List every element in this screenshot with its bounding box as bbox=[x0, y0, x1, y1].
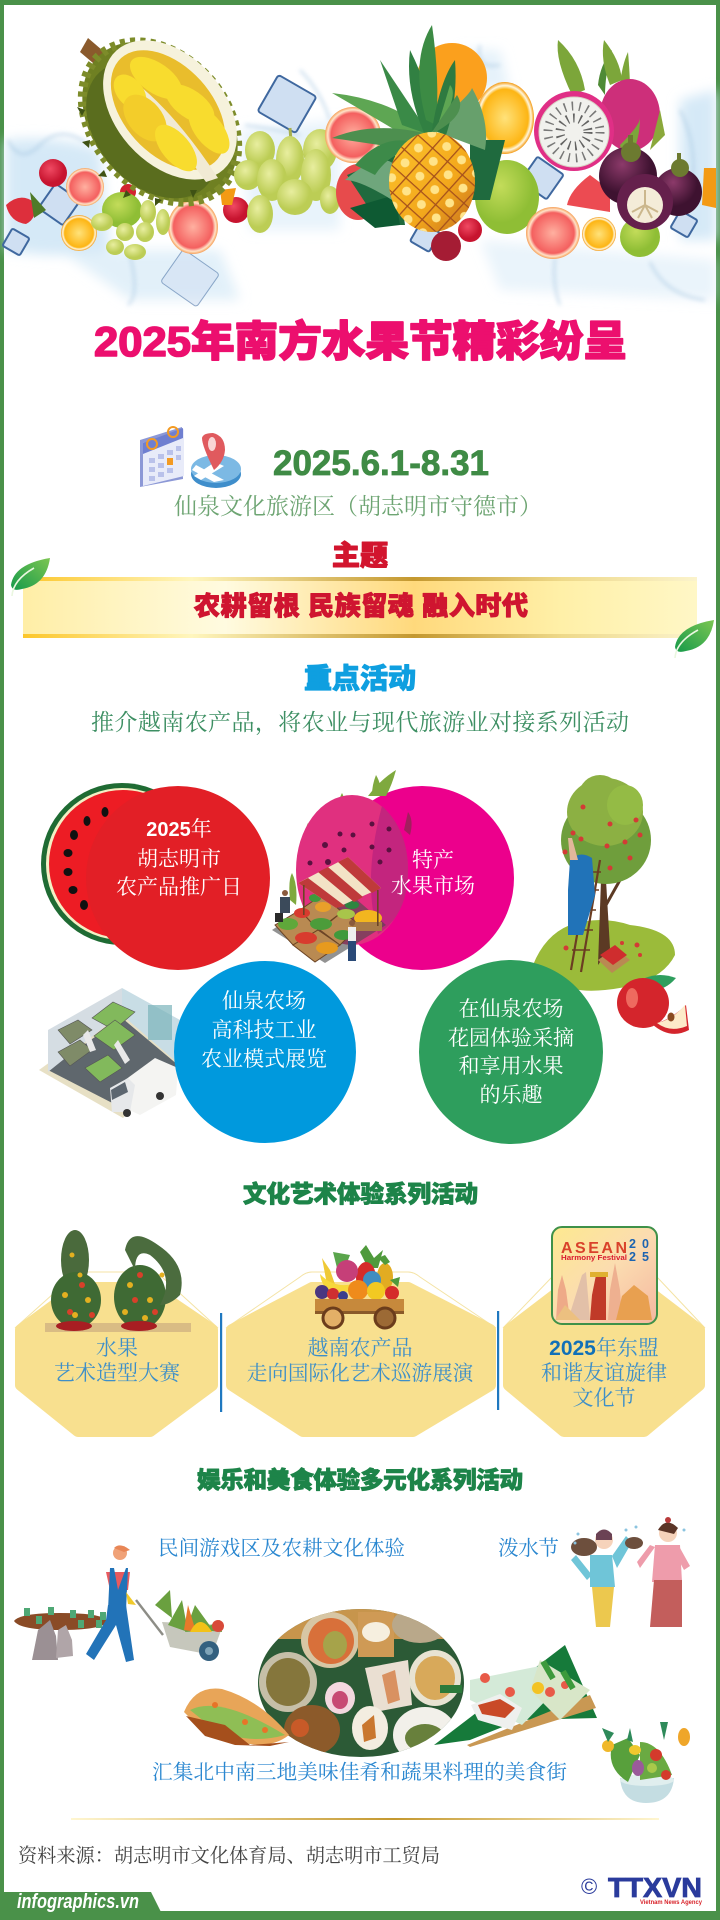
icon: ASEAN festival card: 20 bbox=[629, 1237, 649, 1251]
icon: farmer with wheelbarrow bbox=[14, 1545, 224, 1662]
icon: right leaf bbox=[675, 620, 714, 658]
icon: calendar bbox=[140, 427, 184, 487]
divider bbox=[220, 1313, 222, 1412]
orange bbox=[325, 43, 534, 220]
title: 2025年南方水果节精彩纷呈 bbox=[94, 318, 627, 365]
circle: HCMC agricultural day: 胡志明市 bbox=[137, 847, 221, 871]
water festival label: 泼水节 bbox=[498, 1537, 559, 1560]
panel: ASEAN harmony festival: 和谐友谊旋律 bbox=[541, 1361, 667, 1385]
panel: international art tour: 越南农产品 bbox=[308, 1336, 412, 1360]
dragon fruit bbox=[534, 40, 665, 171]
icon: smart farm bbox=[39, 988, 180, 1118]
water splash bbox=[6, 45, 716, 305]
circle: high-tech farm: 农业模式展览 bbox=[201, 1047, 327, 1071]
icon: ASEAN festival card: 25 bbox=[629, 1250, 649, 1264]
icon: ASEAN festival card bbox=[552, 1227, 657, 1324]
folk games label: 民间游戏区及农耕文化体验 bbox=[158, 1537, 405, 1560]
icon: dragon fruit bbox=[289, 770, 412, 945]
banh mi bbox=[184, 1688, 289, 1746]
circle: HCMC agricultural day: 农产品推广日 bbox=[116, 875, 242, 899]
circle: high-tech farm: 高科技工业 bbox=[212, 1018, 316, 1042]
truck bbox=[110, 1058, 178, 1117]
icon: ASEAN festival card: Harmony Festival bbox=[561, 1253, 627, 1262]
panel: fruit art contest: 水果 bbox=[96, 1336, 138, 1360]
circle: high-tech farm bbox=[174, 961, 356, 1143]
source: 资料来源：胡志明市文化体育局、胡志明市工贸局 bbox=[18, 1845, 440, 1867]
panel: ASEAN harmony festival: 2025年东盟 bbox=[549, 1336, 659, 1360]
circle: high-tech farm: 仙泉农场 bbox=[222, 989, 306, 1013]
icon: left leaf bbox=[11, 558, 50, 596]
theme heading: 主题 bbox=[332, 540, 388, 571]
divider line bbox=[71, 1818, 659, 1820]
circle: specialty fruit market bbox=[289, 770, 514, 970]
circle: fruit picking: 在仙泉农场 bbox=[458, 997, 564, 1021]
theme banner bbox=[23, 577, 697, 638]
panel: international art tour: 走向国际化艺术巡游展演 bbox=[247, 1362, 476, 1385]
panel: fruit art contest: 艺术造型大赛 bbox=[54, 1361, 180, 1385]
key activities subtitle: 推介越南农产品，将农业与现代旅游业对接系列活动 bbox=[91, 710, 629, 736]
food dishes bbox=[184, 1607, 597, 1763]
icon: salad bowl bbox=[602, 1722, 690, 1803]
pineapple bbox=[332, 25, 505, 232]
panel: fruit art contest bbox=[15, 1230, 218, 1431]
TTXVN logo: Vietnam News Agency bbox=[640, 1899, 702, 1906]
circle: fruit picking: 花园体验采摘 bbox=[448, 1026, 574, 1050]
panel: ASEAN harmony festival: 文化节 bbox=[572, 1386, 636, 1410]
footer tab: infographics.vn bbox=[17, 1891, 139, 1913]
icon: fruit dragon sculptures bbox=[45, 1230, 191, 1332]
icon: apple tree with picker bbox=[533, 775, 675, 991]
left small fruits bbox=[6, 159, 249, 260]
green apple bbox=[475, 160, 539, 234]
location text: 仙泉文化旅游区（胡志明市守德市） bbox=[174, 494, 542, 519]
circle: fruit picking: 和享用水果 bbox=[458, 1054, 564, 1078]
icon: two women splashing water bbox=[571, 1517, 690, 1627]
date: 2025.6.1-8.31 bbox=[273, 444, 489, 483]
food circle bbox=[258, 1607, 464, 1763]
mangosteen bbox=[599, 135, 702, 230]
ice cubes bbox=[2, 75, 698, 307]
icon: fruit cart bbox=[315, 1245, 404, 1328]
spring rolls bbox=[434, 1645, 597, 1747]
icon: location pin bbox=[191, 433, 241, 488]
icon: ASEAN festival card: ASEAN bbox=[561, 1240, 627, 1257]
key activities heading: 重点活动 bbox=[304, 663, 416, 694]
durian bbox=[51, 11, 269, 233]
small berries bbox=[431, 218, 482, 261]
circle: HCMC agricultural day: 2025年 bbox=[146, 817, 212, 841]
icon: apples bbox=[617, 975, 689, 1034]
grapes bbox=[234, 128, 340, 233]
hero fruit banner bbox=[2, 11, 716, 307]
circle: specialty fruit market: 特产 bbox=[412, 848, 454, 872]
icon: fruit market stall bbox=[272, 857, 386, 963]
panel: ASEAN harmony festival bbox=[503, 1227, 705, 1431]
circle: fruit picking: 的乐趣 bbox=[480, 1083, 542, 1107]
TTXVN logo: TTXVN bbox=[608, 1872, 702, 1903]
culture section heading: 文化艺术体验系列活动 bbox=[243, 1180, 478, 1207]
theme text: 农耕留根 民族留魂 融入时代 bbox=[194, 591, 528, 621]
right small fruits bbox=[526, 168, 716, 259]
divider bbox=[497, 1311, 499, 1410]
icon: watermelon bbox=[41, 783, 203, 945]
circle: fruit picking bbox=[419, 960, 603, 1144]
entertainment section heading: 娱乐和美食体验多元化系列活动 bbox=[197, 1466, 523, 1493]
panel: international art tour bbox=[226, 1245, 496, 1431]
copyright mark: © bbox=[581, 1874, 597, 1899]
circle: specialty fruit market: 水果市场 bbox=[391, 874, 475, 898]
circle: HCMC agricultural day bbox=[86, 786, 270, 970]
food street label: 汇集北中南三地美味佳肴和蔬果料理的美食街 bbox=[152, 1761, 567, 1784]
